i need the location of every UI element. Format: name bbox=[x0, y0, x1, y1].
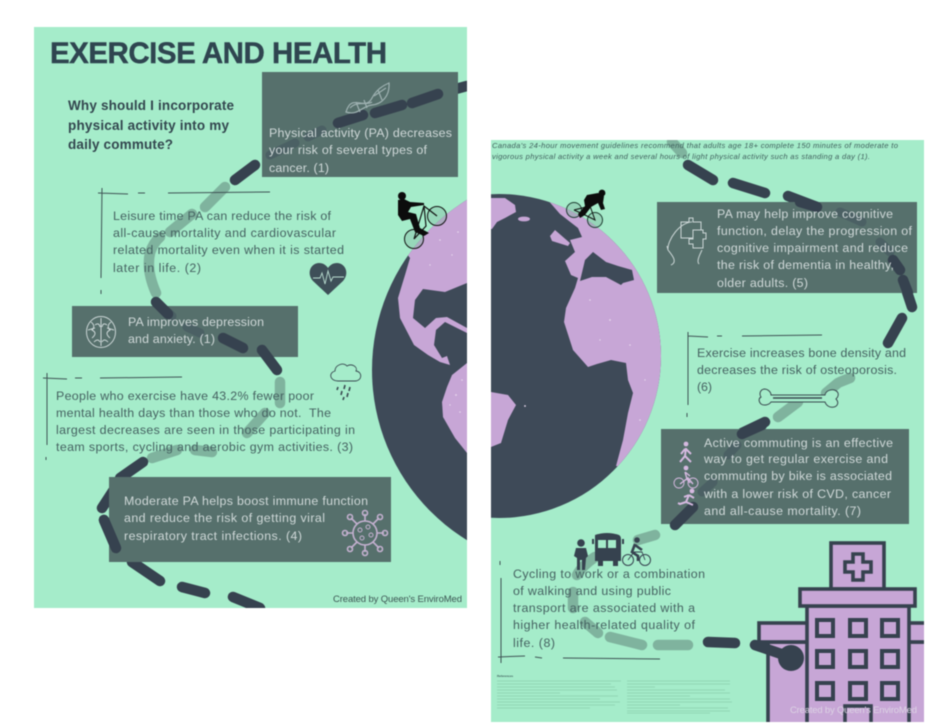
card: cognitive: cognitive impairment and reduce bbox=[717, 241, 908, 255]
illustration: hospital bbox=[759, 543, 929, 726]
text: guidelines note: Canada's 24-hour movement guidelines recommend that adults age 18+ complete 150 minutes of moderate to bbox=[492, 141, 898, 150]
card: cancer: Physical activity (PA) decreases bbox=[269, 126, 452, 140]
icon: walker bbox=[680, 442, 691, 462]
card: cancer bbox=[262, 72, 458, 177]
text block: mental health: People who exercise have 43.2% fewer poor bbox=[56, 389, 314, 403]
icon: bone bbox=[759, 389, 838, 407]
icon: DNA bbox=[346, 83, 389, 113]
card: active commuting: and all-cause mortality. (7) bbox=[704, 504, 861, 518]
title: EXERCISE AND HEALTH bbox=[50, 37, 387, 70]
card: depression: PA improves depression bbox=[128, 315, 264, 329]
subtitle question: daily commute? bbox=[68, 137, 173, 152]
text block: bone density: (6) bbox=[697, 380, 712, 394]
subtitle question: Why should I incorporate bbox=[68, 98, 234, 113]
subtitle question bbox=[68, 98, 234, 152]
globe: right bbox=[490, 193, 662, 519]
card: cognitive: the risk of dementia in healthy, bbox=[717, 258, 894, 272]
text block: mental health bbox=[43, 373, 355, 460]
card: active commuting: with a lower risk of CVD, cancer bbox=[703, 487, 891, 501]
text block: mental health: mental health days than those who do not. The bbox=[56, 406, 331, 420]
credit: right: Created by Queen's EnviroMed bbox=[790, 705, 917, 716]
text block: mental health: team sports, cycling and aerobic gym activities. (3) bbox=[56, 440, 353, 454]
card: cancer: cancer. (1) bbox=[269, 161, 329, 175]
card: cognitive: PA may help improve cognitive bbox=[717, 207, 893, 221]
text block: quality of life: higher health-related quality of bbox=[513, 618, 696, 632]
door bbox=[845, 706, 871, 726]
icon: bus bbox=[592, 533, 624, 566]
card: cognitive: function, delay the progression of bbox=[717, 224, 913, 238]
text block: quality of life bbox=[498, 561, 705, 663]
card: active commuting: Active commuting is an effective bbox=[704, 436, 893, 450]
card: active commuting: commuting by bike is associated bbox=[704, 469, 892, 483]
text block: bone density: Exercise increases bone density and bbox=[697, 346, 906, 360]
text block: quality of life: transport are associated with a bbox=[513, 601, 695, 615]
card: immune: Moderate PA helps boost immune function bbox=[124, 494, 368, 508]
text block: mortality: all-cause mortality and cardiovascular bbox=[113, 226, 336, 240]
icon: pedestrian bbox=[574, 539, 588, 570]
text block: mortality: later in life. (2) bbox=[113, 261, 201, 275]
icon: heart bbox=[310, 263, 346, 295]
globe: left bbox=[371, 200, 468, 541]
credit: left: Created by Queen's EnviroMed bbox=[333, 594, 462, 605]
text block: bone density: decreases the risk of osteoporosis. bbox=[697, 363, 897, 377]
card: active commuting: way to get regular exercise and bbox=[703, 452, 888, 466]
panel: right poster bbox=[490, 139, 925, 723]
text block: mental health: largest decreases are seen in those participating in bbox=[56, 423, 355, 437]
windows bbox=[817, 620, 898, 699]
text block: quality of life: of walking and using public bbox=[513, 584, 671, 598]
icon: cyclist right bbox=[566, 190, 605, 228]
icon: cross bbox=[845, 554, 871, 580]
card: immune: respiratory tract infections. (4) bbox=[124, 529, 302, 543]
card: depression: and anxiety. (1) bbox=[128, 332, 215, 346]
references: References bbox=[497, 674, 514, 678]
text block: quality of life: life. (8) bbox=[513, 636, 555, 650]
card: immune bbox=[104, 477, 391, 562]
card: depression bbox=[72, 302, 298, 370]
icon: bike commuter bbox=[674, 466, 698, 488]
text block: mortality bbox=[98, 188, 344, 294]
icon: rain cloud bbox=[331, 364, 361, 400]
text: guidelines note: vigorous physical activity a week and several hours of light physical activity such as standing a day (1). bbox=[492, 152, 870, 161]
path: left dashes under boxes bbox=[102, 86, 467, 608]
icon: virus bbox=[342, 510, 388, 556]
icon: runner bbox=[678, 489, 694, 505]
text block: quality of life: Cycling to work or a combination bbox=[513, 567, 705, 581]
card: cognitive bbox=[657, 202, 917, 293]
icon: brain bbox=[86, 316, 116, 348]
subtitle question: physical activity into my bbox=[68, 118, 229, 133]
text: guidelines note bbox=[492, 141, 898, 161]
path end marker bbox=[755, 645, 804, 671]
card: cancer: your risk of several types of bbox=[269, 143, 428, 157]
icon: head with puzzle bbox=[667, 218, 706, 265]
path: right dashes under boxes bbox=[573, 142, 912, 645]
text block: mortality: related mortality even when it is started bbox=[113, 243, 344, 257]
card: immune: and reduce the risk of getting viral bbox=[124, 511, 325, 525]
card: cognitive: older adults. (5) bbox=[717, 276, 808, 290]
text block: bone density bbox=[687, 332, 906, 417]
icon: cyclist left bbox=[398, 192, 446, 248]
panel: left poster bbox=[34, 26, 468, 609]
icon: commuter cyclist bbox=[622, 537, 650, 566]
references bbox=[497, 674, 732, 713]
text block: mortality: Leisure time PA can reduce the risk of bbox=[113, 209, 332, 223]
card: active commuting bbox=[661, 425, 909, 525]
